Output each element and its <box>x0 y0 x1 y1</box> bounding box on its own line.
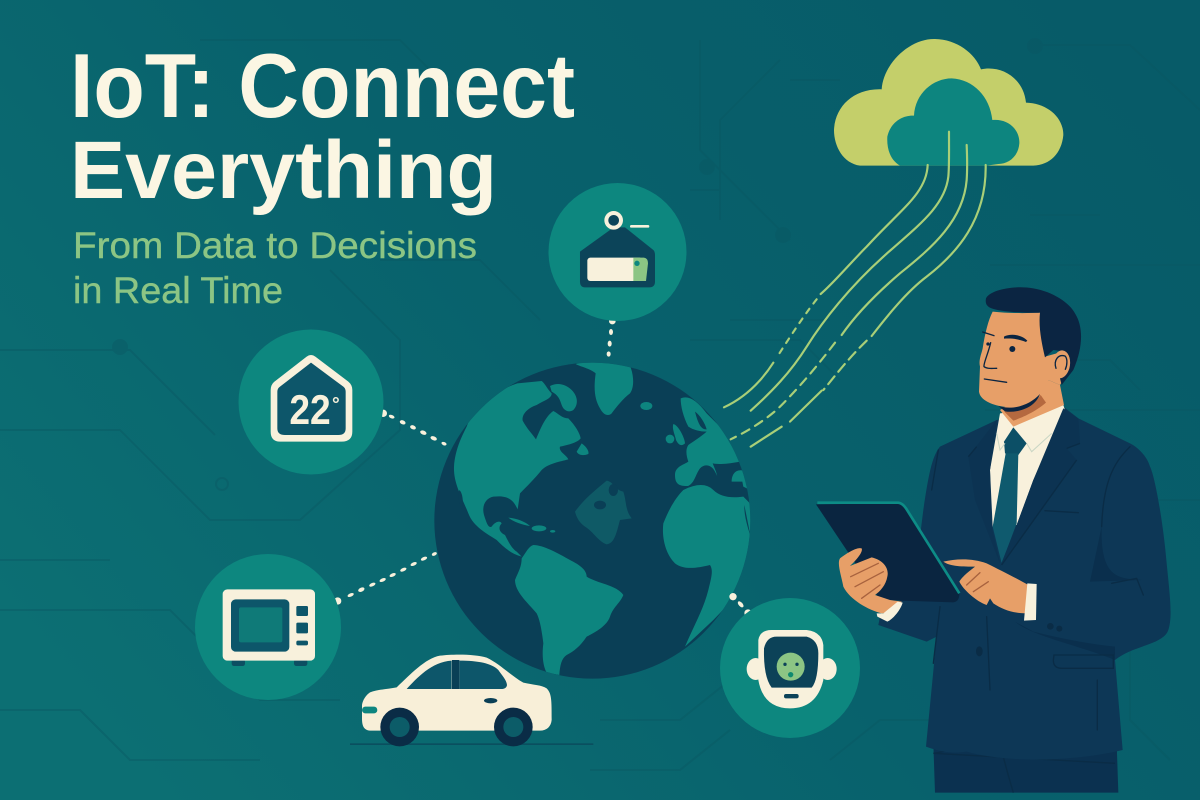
arctic islands <box>550 384 577 411</box>
jacket <box>878 407 1171 760</box>
left hand <box>839 548 902 613</box>
title <box>70 36 575 216</box>
connector: wearable to globe <box>729 593 752 617</box>
road <box>350 743 593 745</box>
right hand <box>943 559 1028 613</box>
back cloud <box>834 39 1063 166</box>
continents <box>454 361 763 675</box>
south america <box>515 545 623 675</box>
central faint landmass <box>575 481 632 544</box>
tie <box>1004 427 1027 455</box>
subtitle <box>73 225 477 311</box>
jacket shading <box>1015 527 1142 660</box>
door handle <box>484 698 497 703</box>
lapels <box>968 420 1000 563</box>
car body <box>362 655 552 731</box>
icon: thermostat 22 degrees: 22 <box>289 387 331 433</box>
caribbean islands <box>508 518 530 526</box>
title: Everything <box>70 125 497 216</box>
hair <box>986 287 1081 385</box>
madagascar sliver <box>744 505 750 534</box>
mediterranean sea <box>688 462 744 487</box>
title: IoT: Connect <box>70 36 575 137</box>
facial features <box>983 332 1067 382</box>
baltic sea <box>695 412 707 429</box>
africa <box>662 485 750 646</box>
ocean <box>434 363 750 679</box>
icon: connected car <box>350 655 593 746</box>
icon: connected device <box>548 183 686 321</box>
iceland and britain <box>673 424 685 445</box>
connector: top device to globe <box>607 318 616 357</box>
businessman with tablet <box>816 287 1171 793</box>
icon: thermostat 22 degrees <box>238 330 384 474</box>
wheels <box>380 708 419 746</box>
collar fold <box>997 433 1052 452</box>
tablet <box>816 503 959 602</box>
front cloud <box>887 78 1019 166</box>
car windows <box>407 661 507 689</box>
face <box>979 312 1070 407</box>
left cuff <box>877 602 903 622</box>
neck <box>1000 380 1064 427</box>
connector: thermostat and microwave to globe <box>334 410 447 605</box>
subtitle: in Real Time <box>73 270 283 311</box>
jacket buttons <box>976 623 1062 656</box>
data streams <box>724 132 986 447</box>
icon: thermostat 22 degrees: ° <box>332 395 340 416</box>
chin shadow <box>998 394 1040 412</box>
cloud with data streams <box>724 39 1063 447</box>
ear <box>1050 349 1072 379</box>
north america <box>454 381 581 557</box>
right cuff <box>1024 583 1037 621</box>
globe <box>434 361 763 679</box>
icon: smart wearable robot <box>720 598 860 738</box>
europe <box>675 397 747 488</box>
trousers <box>933 743 1118 793</box>
headlight <box>362 707 377 713</box>
shirt <box>990 405 1065 527</box>
icon: microwave <box>195 554 341 700</box>
subtitle: From Data to Decisions <box>73 225 477 266</box>
greenland <box>576 361 633 415</box>
